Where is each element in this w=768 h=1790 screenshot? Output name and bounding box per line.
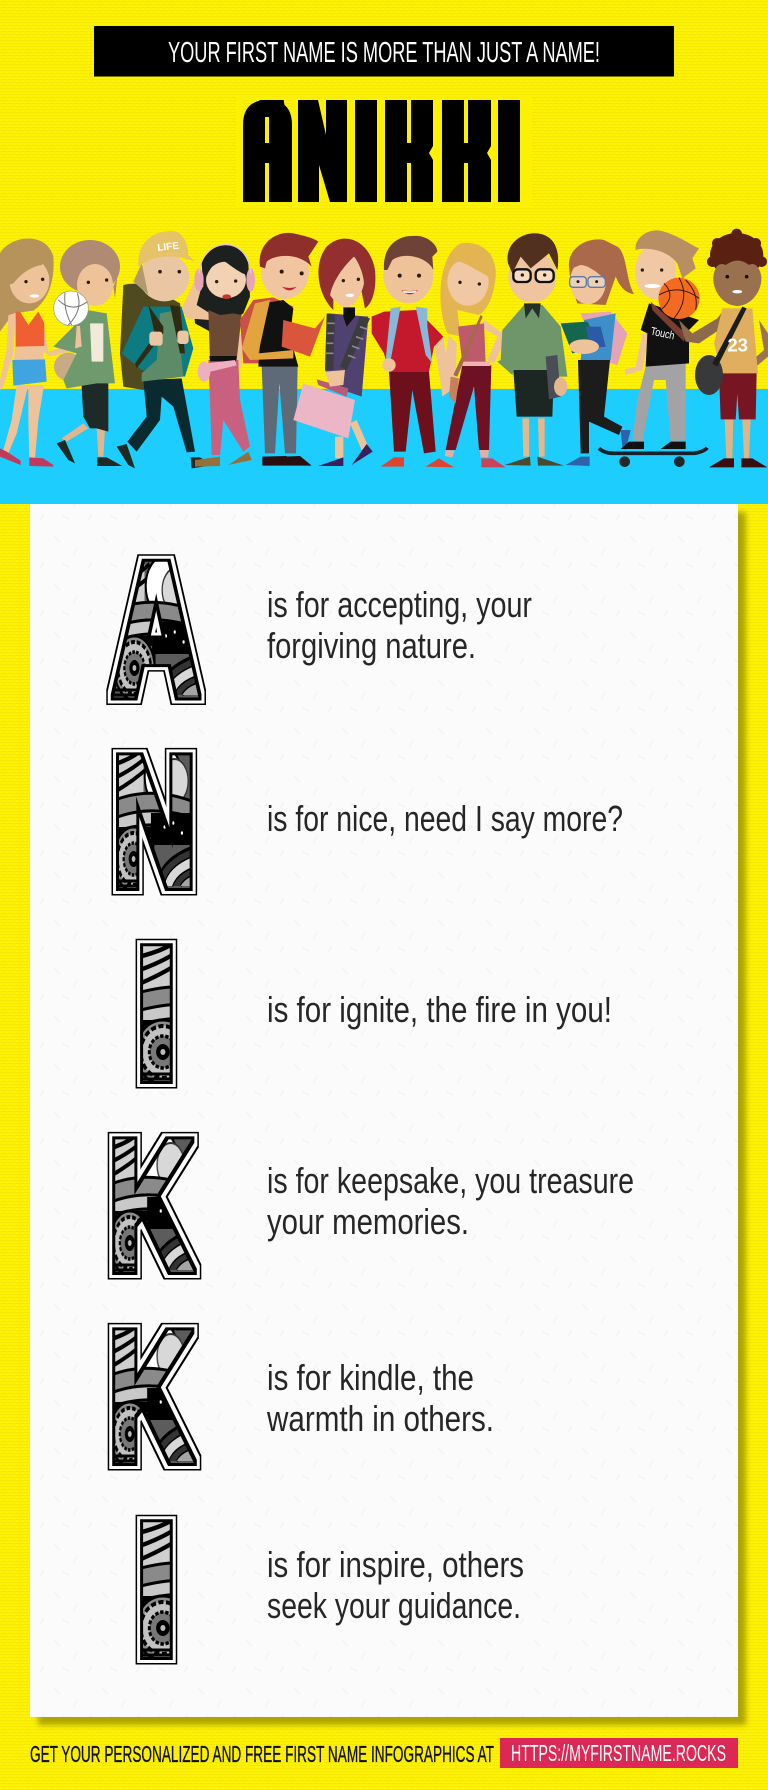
person: girl with orange top — [0, 238, 80, 467]
letter A mandala: A — [113, 523, 199, 736]
text: A line — [267, 584, 532, 666]
person: skater with basketball: Touch — [650, 326, 676, 342]
person: hiker with backpack — [117, 231, 213, 468]
person: girl with pink bag — [293, 239, 375, 466]
text: second I line — [267, 1544, 524, 1626]
letter I mandala: I — [134, 908, 179, 1120]
white content panel — [30, 504, 738, 1717]
text: second I line: is for inspire, others — [267, 1544, 524, 1585]
letter I mandala second: I — [134, 1484, 179, 1696]
white panel shadow — [38, 512, 746, 1725]
text: A line: is for accepting, your — [267, 584, 532, 625]
tagline banner — [94, 26, 674, 76]
blue floor band — [0, 389, 768, 504]
person: boy in red shirt — [372, 236, 454, 467]
text: second K line: is for kindle, the — [267, 1357, 474, 1398]
letter N mandala: N — [112, 717, 196, 926]
person: blonde girl — [440, 243, 507, 467]
person: hiker with backpack: LIFE — [157, 241, 180, 254]
person: girl with ponytail and tablet — [561, 239, 634, 466]
text: K line: your memories. — [267, 1201, 469, 1242]
person: boy in yellow tank: 23 — [727, 335, 748, 356]
title name: ANIKKI — [250, 68, 518, 233]
letter K mandala second: K — [109, 1292, 192, 1501]
text: K line — [267, 1160, 634, 1242]
person: girl with headphones — [182, 245, 255, 467]
text: second I line: seek your guidance. — [267, 1585, 521, 1626]
person: boy with open book — [240, 233, 325, 466]
text: A line: forgiving nature. — [267, 625, 476, 666]
text: K line: is for keepsake, you treasure — [267, 1160, 634, 1201]
text: second K line: warmth in others. — [266, 1398, 494, 1439]
letter K mandala: K — [109, 1101, 192, 1310]
person: boy with glasses in green sweater — [497, 233, 567, 466]
text: N line: is for nice, need I say more? — [267, 798, 623, 839]
people illustration — [0, 229, 768, 468]
person: girl with volleyball — [53, 240, 122, 466]
text: second K line — [266, 1357, 494, 1439]
text: I line: is for ignite, the fire in you! — [267, 989, 612, 1030]
person: skater with basketball — [599, 230, 724, 467]
person: boy in yellow tank — [695, 229, 768, 467]
